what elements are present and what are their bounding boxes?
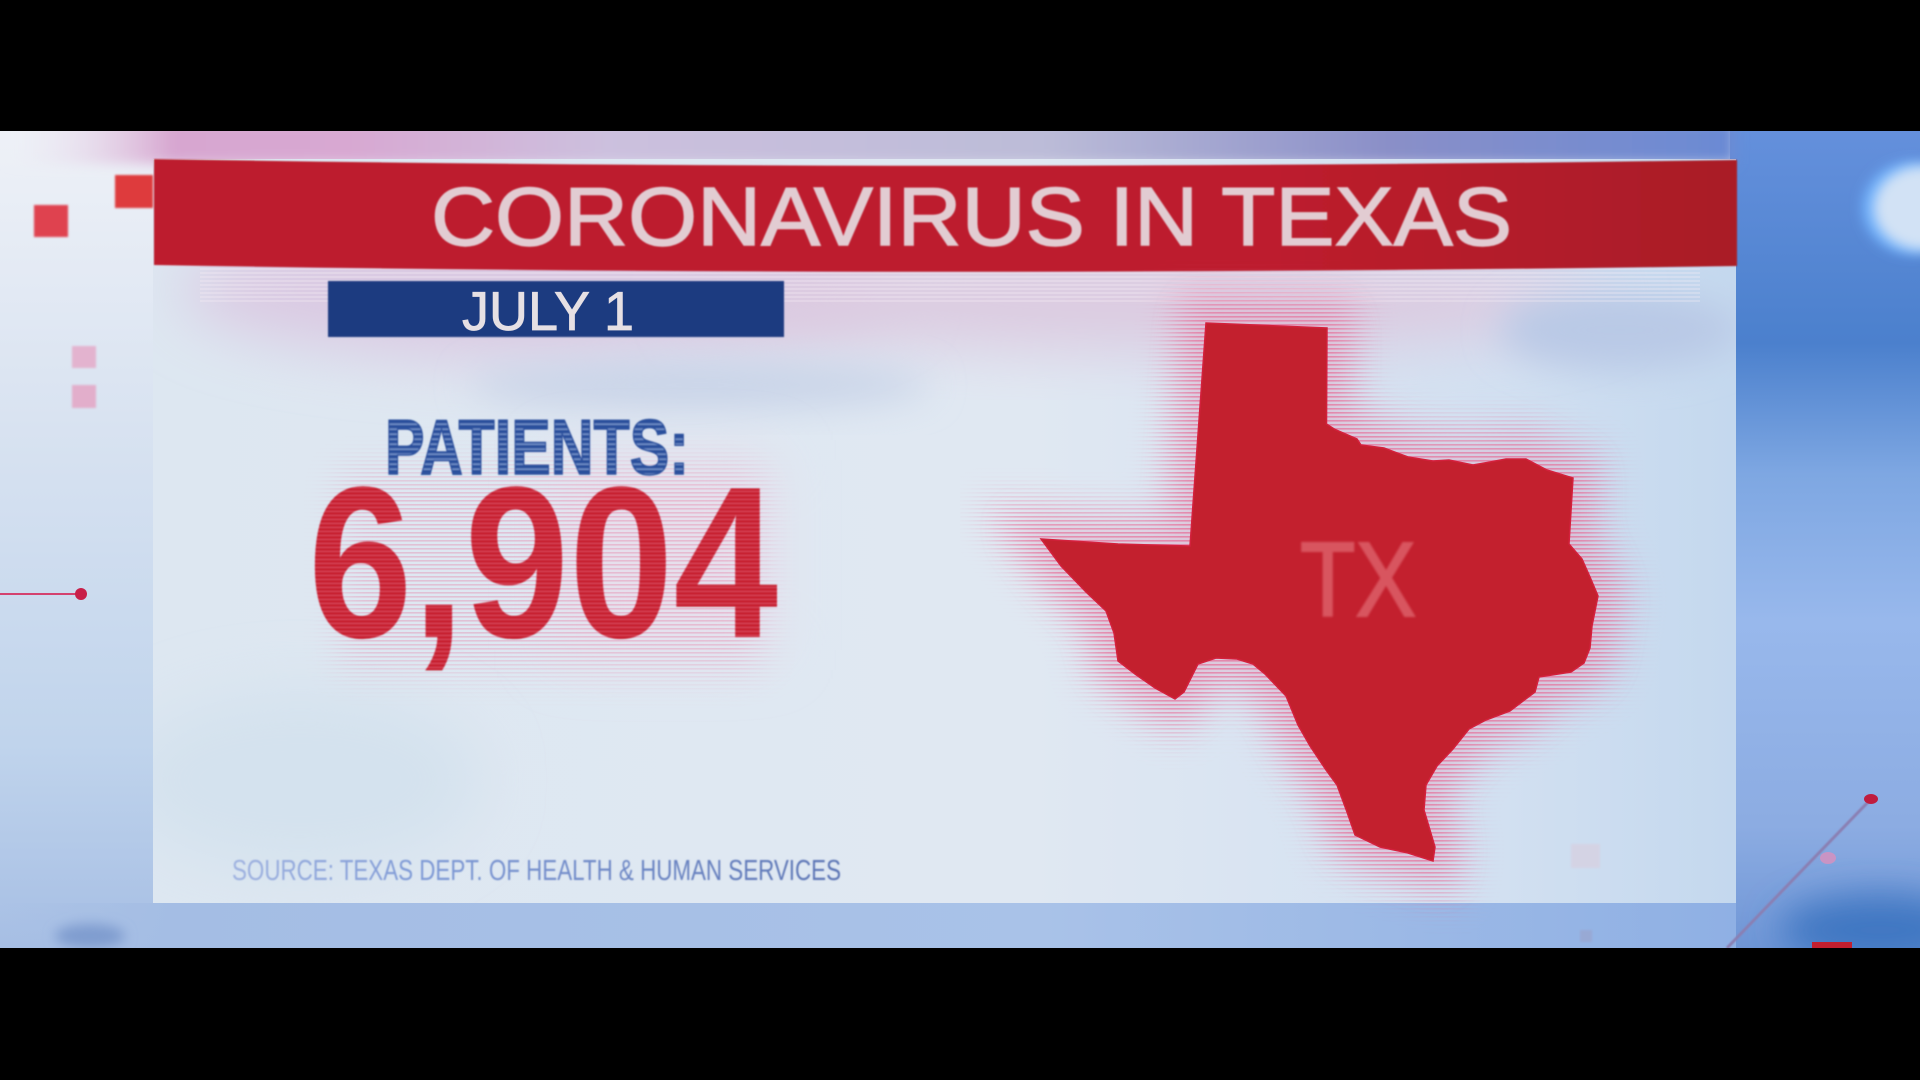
state abbreviation: TX xyxy=(1300,521,1416,639)
letterbox bottom band xyxy=(0,948,1920,1080)
background field xyxy=(0,120,1920,966)
connector line left with node xyxy=(0,588,87,600)
decorative red square large xyxy=(115,175,153,208)
decorative red square small xyxy=(34,205,68,237)
small red tab at bottom right xyxy=(1812,942,1852,948)
faint square in lower strip xyxy=(1580,930,1592,942)
source line: SOURCE: TEXAS DEPT. OF HEALTH & HUMAN SERVICES xyxy=(232,855,841,887)
date badge xyxy=(328,280,784,342)
decorative pink square lower xyxy=(72,385,96,408)
title banner xyxy=(154,159,1737,272)
patient count: 6,904 xyxy=(308,441,778,683)
faint square near map xyxy=(1571,844,1600,868)
patients label: PATIENTS: xyxy=(385,403,689,491)
map glow around Texas xyxy=(968,272,1650,912)
decorative pink square upper xyxy=(72,346,96,368)
scan lines behind patient count xyxy=(326,456,774,682)
date text: JULY 1 xyxy=(462,280,634,342)
title text: CORONAVIRUS IN TEXAS xyxy=(431,170,1512,263)
letterbox top band xyxy=(0,0,1920,131)
connector line lower right with node xyxy=(1727,794,1878,948)
broadcast graphic frame xyxy=(0,131,1920,948)
map of Texas xyxy=(1041,323,1598,861)
panel: main card xyxy=(120,159,1740,903)
scan lines under title xyxy=(200,268,1700,304)
